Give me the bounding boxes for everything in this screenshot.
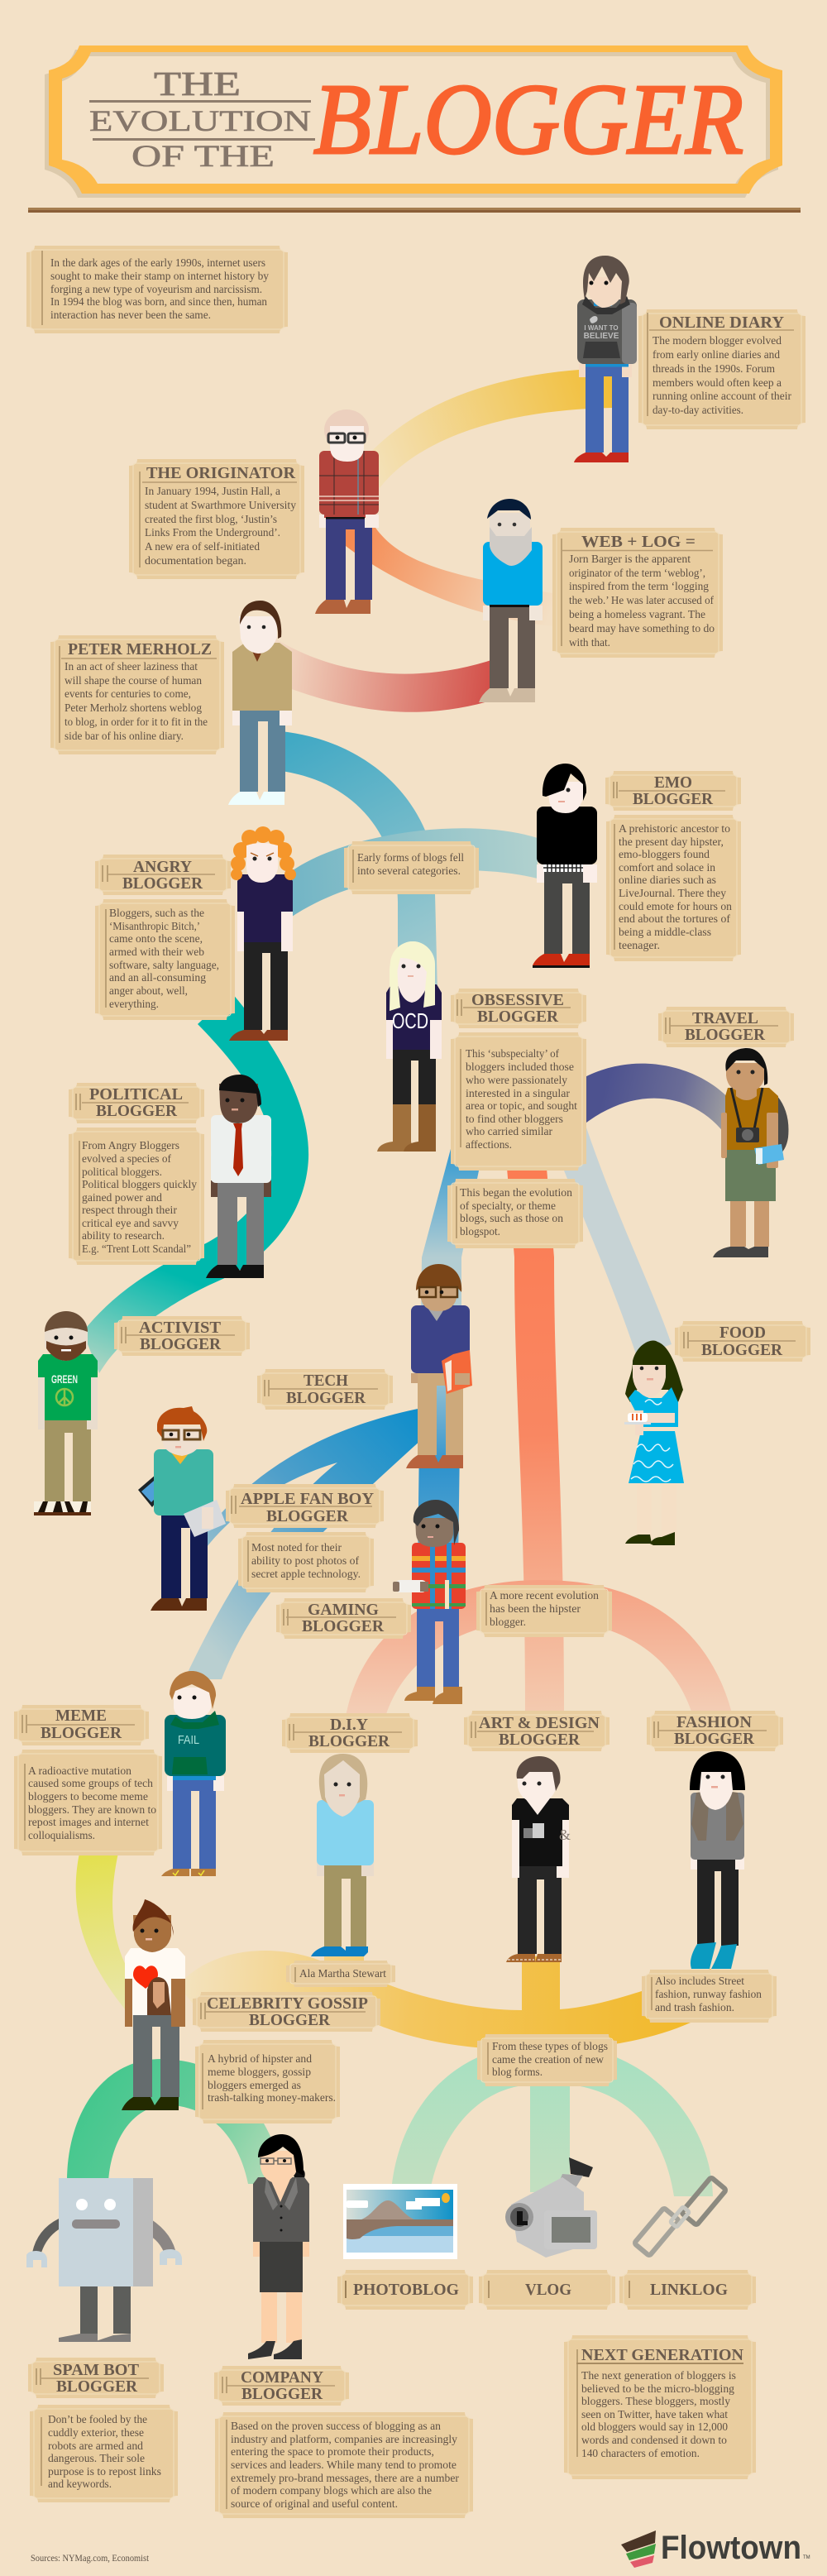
- figure: obsessive blogger: [377, 941, 442, 1152]
- label: vlog: VLOG: [525, 2281, 571, 2299]
- panel: meme text: bloggers. They are known to: [28, 1803, 156, 1816]
- arrow: obsessive to tech and gaming: [418, 1146, 484, 1563]
- panel: began evolution: [447, 1179, 583, 1248]
- figure: web log blogger: [479, 499, 543, 702]
- label: celebrity gossip blogger: CELEBRITY GOSSIP: [207, 1994, 368, 2013]
- label: activist blogger: BLOGGER: [140, 1335, 222, 1353]
- label: emo blogger: EMO: [654, 773, 692, 792]
- panel: next generation: believed to be the micro-blogging: [581, 2382, 734, 2395]
- panel: new blog forms: [477, 2034, 617, 2086]
- panel: political text: Political bloggers quickly: [82, 1178, 197, 1190]
- panel: intro: In the dark ages of the early 1990s, internet users: [50, 256, 265, 269]
- panel: company text: entering the space to promote their products,: [231, 2445, 434, 2458]
- panel: company text: extremely pro-brand messages, there are a number: [231, 2472, 459, 2484]
- panel: peter merholz: events for centuries to come,: [65, 687, 191, 700]
- panel: spam bot text: Don’t be fooled by the: [48, 2413, 147, 2425]
- panel: obsessive text: [451, 1032, 586, 1171]
- arrow: online diary to originator: [368, 368, 612, 488]
- panel: celebrity text: meme bloggers, gossip: [208, 2066, 311, 2078]
- logo: flowtown: Flowtown: [661, 2530, 801, 2566]
- panel: spam bot text: and keywords.: [48, 2478, 112, 2490]
- figure: art and design blogger: [506, 1756, 571, 1962]
- panel: angry text: armed with their web: [109, 946, 204, 958]
- panel: intro: forging a new type of voyeurism and narcissism.: [50, 283, 262, 295]
- panel: the originator: student at Swarthmore University: [145, 499, 296, 511]
- title banner: [45, 45, 782, 198]
- arrow: green arch spam and company: [67, 2059, 285, 2184]
- label: angry blogger: ANGRY: [133, 858, 193, 876]
- panel: the originator: [129, 459, 304, 579]
- label: emo blogger: BLOGGER: [633, 790, 714, 808]
- figure: food blogger: [624, 1341, 684, 1545]
- label: gaming blogger: [276, 1598, 411, 1639]
- panel: angry text: ‘Misanthropic Bitch,’: [109, 920, 200, 932]
- title banner: OF THE: [131, 140, 275, 174]
- panel: political text: political bloggers.: [82, 1166, 162, 1178]
- panel: fashion text: fashion, runway fashion: [655, 1988, 762, 2000]
- panel: peter merholz: [50, 635, 224, 754]
- label: travel blogger: BLOGGER: [685, 1026, 766, 1044]
- arrow: angry to political and activist: [83, 993, 308, 1373]
- panel: fashion text: and trash fashion.: [655, 2001, 734, 2013]
- arrow: originator to web log: [346, 523, 552, 626]
- icon: video camera: [505, 2157, 597, 2258]
- panel: new blog forms: blog forms.: [492, 2066, 543, 2078]
- label: company blogger: BLOGGER: [241, 2385, 323, 2403]
- panel: meme text: caused some groups of tech: [28, 1777, 153, 1789]
- panel: new blog forms: From these types of blogs: [492, 2040, 608, 2052]
- panel: spam bot text: robots are armed and: [48, 2440, 143, 2452]
- arrow: obsessive to food: [562, 1125, 672, 1357]
- panel: the originator: created the first blog, ‘Justin’s: [145, 513, 277, 525]
- label: meme blogger: BLOGGER: [41, 1724, 122, 1742]
- panel: apple text: Most noted for their: [251, 1541, 342, 1554]
- figure: tech blogger: [406, 1264, 472, 1468]
- panel: political text: respect through their: [82, 1204, 178, 1216]
- label: apple fan boy blogger: APPLE FAN BOY: [241, 1490, 375, 1508]
- panel: the originator: Links From the Underground’.: [145, 526, 280, 539]
- label: fashion blogger: BLOGGER: [674, 1730, 755, 1748]
- panel: political text: [69, 1128, 204, 1265]
- arrow: peter merholz to early forms: [281, 731, 437, 993]
- panel: company text: Based on the proven success of blogging as an: [231, 2420, 441, 2432]
- panel: online diary: ONLINE DIARY: [659, 314, 785, 332]
- panel: apple text: secret apple technology.: [251, 1568, 361, 1580]
- panel: hipster evolution: blogger.: [490, 1616, 526, 1628]
- figure: activist blogger: GREEN: [51, 1372, 78, 1386]
- panel: next generation: old bloggers would say in 12,000: [581, 2420, 728, 2433]
- panel: meme text: bloggers to become meme: [28, 1790, 148, 1803]
- label: meme blogger: MEME: [55, 1707, 107, 1725]
- panel: political text: critical eye and savvy: [82, 1217, 179, 1229]
- figure: activist blogger: [34, 1311, 98, 1515]
- panel: angry text: anger about, well,: [109, 984, 188, 997]
- label: food blogger: FOOD: [719, 1324, 766, 1342]
- panel: online diary: day-to-day activities.: [653, 404, 743, 416]
- panel: political text: E.g. “Trent Lott Scandal”: [82, 1243, 191, 1255]
- label: diy blogger: [282, 1713, 418, 1753]
- arrow: obsessive to travel: [579, 1064, 740, 1137]
- figure: celebrity gossip blogger: [122, 1899, 185, 2110]
- label: company blogger: [214, 2366, 349, 2406]
- panel: online diary: running online account of their: [653, 390, 792, 402]
- panel: early forms: into several categories.: [357, 864, 461, 877]
- arrow: green arch photoblog vlog linklog: [391, 2043, 713, 2196]
- panel: angry text: came onto the scene,: [109, 932, 203, 945]
- panel: emo text: end about the tortures of: [619, 912, 731, 925]
- panel: obsessive text: This ‘subspecialty’ of: [466, 1047, 559, 1060]
- panel: celebrity text: [195, 2040, 340, 2124]
- panel: online diary: The modern blogger evolved: [653, 334, 782, 347]
- label: food blogger: [675, 1321, 810, 1362]
- panel: next generation: 140 characters of emotion.: [581, 2447, 700, 2459]
- panel: obsessive text: affections.: [466, 1138, 512, 1151]
- panel: online diary: [638, 309, 805, 429]
- panel: political text: From Angry Bloggers: [82, 1139, 179, 1152]
- label: meme blogger: [14, 1705, 149, 1745]
- panel: began evolution: This began the evolution: [460, 1186, 572, 1199]
- label: obsessive blogger: OBSESSIVE: [471, 991, 564, 1009]
- figure: spam bot: [26, 2178, 182, 2342]
- panel: emo text: LiveJournal. There they: [619, 887, 726, 899]
- panel: next generation: seen on Twitter, have taken what: [581, 2408, 728, 2420]
- panel: obsessive text: interested in a singular: [466, 1087, 571, 1099]
- panel: meme text: colloquialisms.: [28, 1829, 95, 1841]
- label: art and design blogger: ART & DESIGN: [479, 1714, 600, 1732]
- panel: emo text: teenager.: [619, 939, 660, 951]
- panel: web + log: WEB + LOG =: [581, 533, 696, 551]
- arrow: web log to peter merholz: [273, 637, 496, 712]
- panel: celebrity text: A hybrid of hipster and: [208, 2052, 312, 2065]
- label: apple fan boy blogger: [226, 1484, 384, 1528]
- panel: meme text: A radioactive mutation: [28, 1764, 131, 1777]
- panel: obsessive text: who carried similar: [466, 1125, 552, 1137]
- panel: web + log: inspired from the term ‘logging: [569, 580, 709, 592]
- panel: meme text: repost images and internet: [28, 1816, 149, 1828]
- figure: art and design blogger: &: [559, 1827, 571, 1843]
- panel: web + log: [552, 528, 723, 658]
- label: diy blogger: D.I.Y: [330, 1716, 369, 1734]
- panel: peter merholz: PETER MERHOLZ: [68, 640, 212, 658]
- panel: apple text: [238, 1532, 374, 1592]
- label: gaming blogger: BLOGGER: [302, 1617, 385, 1635]
- figure: meme blogger: [161, 1671, 226, 1876]
- icon: chain link: [634, 2177, 726, 2256]
- label: obsessive blogger: [451, 989, 586, 1028]
- label: tech blogger: BLOGGER: [286, 1389, 366, 1407]
- arrow: obsessive to hipster: [506, 1158, 564, 1717]
- title banner: EVOLUTION: [89, 104, 311, 137]
- panel: spam bot text: [30, 2405, 178, 2502]
- panel: the originator: In January 1994, Justin Hall, a: [145, 485, 280, 497]
- panel: new blog forms: came the creation of new: [492, 2053, 604, 2066]
- figure: company blogger: [248, 2134, 309, 2359]
- label: angry blogger: [95, 855, 231, 895]
- panel: intro: interaction has never been the same.: [50, 309, 211, 321]
- label: fashion blogger: [647, 1711, 783, 1751]
- panel: web + log: beard may have something to do: [569, 622, 715, 634]
- panel: spam bot text: cuddly exterior, these: [48, 2426, 144, 2439]
- figure: online diary blogger: BELIEVE: [584, 332, 619, 341]
- panel: early forms: [344, 841, 479, 894]
- panel: began evolution: blogs, such as those on: [460, 1212, 563, 1224]
- label: activist blogger: ACTIVIST: [139, 1319, 222, 1337]
- label: art and design blogger: BLOGGER: [499, 1731, 581, 1749]
- label: tech blogger: [257, 1369, 393, 1410]
- panel: ala martha stewart: [286, 1961, 395, 1987]
- panel: intro: In 1994 the blog was born, and since then, human: [50, 295, 267, 308]
- panel: the originator: A new era of self-initiated: [145, 540, 260, 553]
- label: activist blogger: [114, 1316, 250, 1356]
- label: travel blogger: TRAVEL: [692, 1009, 758, 1027]
- panel: angry text: and an all-consuming: [109, 971, 206, 984]
- label: food blogger: BLOGGER: [701, 1341, 783, 1359]
- label: tech blogger: TECH: [304, 1372, 348, 1390]
- panel: next generation: words and condensed it down to: [581, 2434, 727, 2446]
- label: political blogger: POLITICAL: [89, 1085, 183, 1104]
- panel: emo text: emo-bloggers found: [619, 848, 710, 860]
- panel: obsessive text: who were passionately: [466, 1074, 567, 1086]
- arrow: hipster arch: [346, 1580, 733, 1717]
- figure: political blogger: [206, 1075, 271, 1278]
- label: spam bot blogger: [28, 2358, 164, 2398]
- panel: celebrity text: bloggers emerged as: [208, 2079, 301, 2091]
- label: art and design blogger: [464, 1711, 609, 1751]
- panel: hipster evolution: A more recent evolution: [490, 1589, 599, 1602]
- figure: meme blogger: FAIL: [178, 1733, 199, 1747]
- panel: peter merholz: side bar of his online diary.: [65, 730, 184, 742]
- logo: flowtown: TM: [803, 2555, 810, 2560]
- label: gaming blogger: GAMING: [308, 1601, 379, 1619]
- panel: web + log: originator of the term ‘weblog’,: [569, 567, 705, 579]
- panel: angry text: Bloggers, such as the: [109, 907, 204, 919]
- panel: hipster evolution: [476, 1585, 612, 1637]
- figure: peter merholz: [228, 601, 292, 805]
- label: vlog: [479, 2270, 615, 2310]
- label: political blogger: [69, 1083, 204, 1123]
- panel: company text: industry and platform, companies are increasingly: [231, 2433, 457, 2445]
- panel: angry text: everything.: [109, 998, 159, 1010]
- label: fashion blogger: FASHION: [676, 1713, 753, 1731]
- panel: intro: sought to make their stamp on internet history by: [50, 270, 269, 282]
- panel: political text: gained power and: [82, 1191, 162, 1204]
- panel: fashion text: [642, 1970, 777, 2023]
- arrow: gold arch to new blog forms: [178, 1951, 711, 2050]
- label: travel blogger: [658, 1007, 794, 1047]
- panel: obsessive text: area or topic, and sought: [466, 1099, 577, 1112]
- panel: emo text: A prehistoric ancestor to: [619, 822, 730, 835]
- arrow: arch from angry to emo: [289, 828, 538, 918]
- panel: spam bot text: purpose is to repost links: [48, 2465, 161, 2478]
- panel: online diary: members would often keep a: [653, 376, 782, 389]
- icon: photo: [343, 2184, 457, 2259]
- label: photoblog: PHOTOBLOG: [353, 2281, 459, 2299]
- panel: web + log: being a homeless vagrant. The: [569, 608, 705, 620]
- panel: emo text: online diaries such as: [619, 874, 716, 886]
- figure: emo blogger: [533, 764, 597, 968]
- panel: emo text: [606, 815, 741, 961]
- panel: ala martha stewart: Ala Martha Stewart: [299, 1967, 386, 1980]
- panel: peter merholz: Peter Merholz shortens weblog: [65, 701, 202, 714]
- figure: travel blogger: [713, 1048, 788, 1257]
- panel: obsessive text: to find other bloggers: [466, 1113, 563, 1125]
- panel: political text: evolved a species of: [82, 1152, 171, 1165]
- panel: emo text: could emote for hours on: [619, 900, 732, 912]
- panel: emo text: comfort and solace in: [619, 861, 715, 874]
- figure: gaming blogger: [393, 1500, 466, 1704]
- panel: fashion text: Also includes Street: [655, 1975, 744, 1987]
- panel: emo text: the present day hipster,: [619, 836, 724, 848]
- label: spam bot blogger: SPAM BOT: [53, 2361, 140, 2379]
- sources note: Sources: NYMag.com, Economist: [31, 2552, 150, 2564]
- panel: angry text: [95, 899, 235, 1020]
- title rule: [28, 208, 801, 213]
- panel: web + log: with that.: [569, 636, 610, 649]
- panel: company text: source of original and useful content.: [231, 2497, 398, 2510]
- panel: next generation: NEXT GENERATION: [581, 2346, 744, 2364]
- panel: next generation: bloggers. These bloggers, mostly: [581, 2395, 730, 2407]
- panel: the originator: documentation began.: [145, 554, 246, 567]
- panel: celebrity text: trash-talking money-makers.: [208, 2091, 336, 2104]
- panel: company text: of modern company blogs which are also the: [231, 2484, 432, 2497]
- panel: the originator: THE ORIGINATOR: [146, 464, 296, 482]
- figure: online diary blogger: I WANT TO: [584, 324, 619, 332]
- figure: online diary blogger: [574, 256, 637, 462]
- figure: apple fan boy blogger: [138, 1406, 226, 1611]
- panel: online diary: threads in the 1990s. Forum: [653, 362, 775, 375]
- label: diy blogger: BLOGGER: [308, 1732, 390, 1750]
- panel: began evolution: of specialty, or theme: [460, 1199, 556, 1212]
- panel: intro: [26, 246, 288, 333]
- panel: apple text: ability to post photos of: [251, 1554, 360, 1567]
- arrow: tech to apple fan boy and meme: [184, 1408, 422, 1679]
- label: political blogger: BLOGGER: [96, 1102, 178, 1120]
- panel: web + log: Jorn Barger is the apparent: [569, 553, 691, 565]
- panel: political text: ability to research.: [82, 1229, 165, 1242]
- figure: obsessive blogger: OCD: [392, 1008, 428, 1033]
- label: company blogger: COMPANY: [241, 2368, 324, 2387]
- figure: diy blogger: [311, 1754, 374, 1956]
- panel: company text: services and leaders. While many tend to promote: [231, 2459, 457, 2471]
- label: celebrity gossip blogger: [193, 1992, 380, 2032]
- label: apple fan boy blogger: BLOGGER: [266, 1507, 349, 1525]
- panel: angry text: software, salty language,: [109, 959, 219, 971]
- label: linklog: LINKLOG: [650, 2281, 728, 2299]
- panel: began evolution: blogspot.: [460, 1225, 500, 1238]
- panel: peter merholz: will shape the course of human: [65, 674, 202, 687]
- label: obsessive blogger: BLOGGER: [477, 1008, 559, 1026]
- title banner: BLOGGER: [313, 64, 743, 175]
- panel: online diary: from early online diaries and: [653, 348, 780, 361]
- label: emo blogger: [605, 771, 741, 811]
- title banner: THE: [154, 65, 241, 103]
- label: linklog: [619, 2270, 756, 2310]
- panel: hipster evolution: has been the hipster: [490, 1602, 581, 1615]
- panel: peter merholz: In an act of sheer laziness that: [65, 660, 198, 673]
- panel: web + log: the web.’ He was later accused of: [569, 594, 714, 606]
- panel: early forms: Early forms of blogs fell: [357, 851, 464, 864]
- panel: next generation: The next generation of bloggers is: [581, 2369, 736, 2382]
- label: angry blogger: BLOGGER: [122, 874, 203, 893]
- panel: company text: [215, 2412, 473, 2518]
- label: photoblog: [337, 2270, 473, 2310]
- figure: fashion blogger: [690, 1751, 745, 1969]
- panel: next generation: [564, 2335, 756, 2479]
- figure: angry blogger: [229, 826, 296, 1041]
- label: celebrity gossip blogger: BLOGGER: [249, 2011, 331, 2029]
- panel: obsessive text: bloggers included those: [466, 1061, 574, 1073]
- panel: emo text: being a middle-class: [619, 926, 711, 938]
- panel: spam bot text: dangerous. Their sole: [48, 2452, 145, 2464]
- figure: originator: [315, 409, 379, 614]
- label: spam bot blogger: BLOGGER: [56, 2377, 138, 2396]
- panel: peter merholz: to blog, in order for it to fit in the: [65, 716, 208, 728]
- panel: meme text: [14, 1750, 162, 1855]
- arrow: meme to celebrity gossip: [76, 1853, 132, 2018]
